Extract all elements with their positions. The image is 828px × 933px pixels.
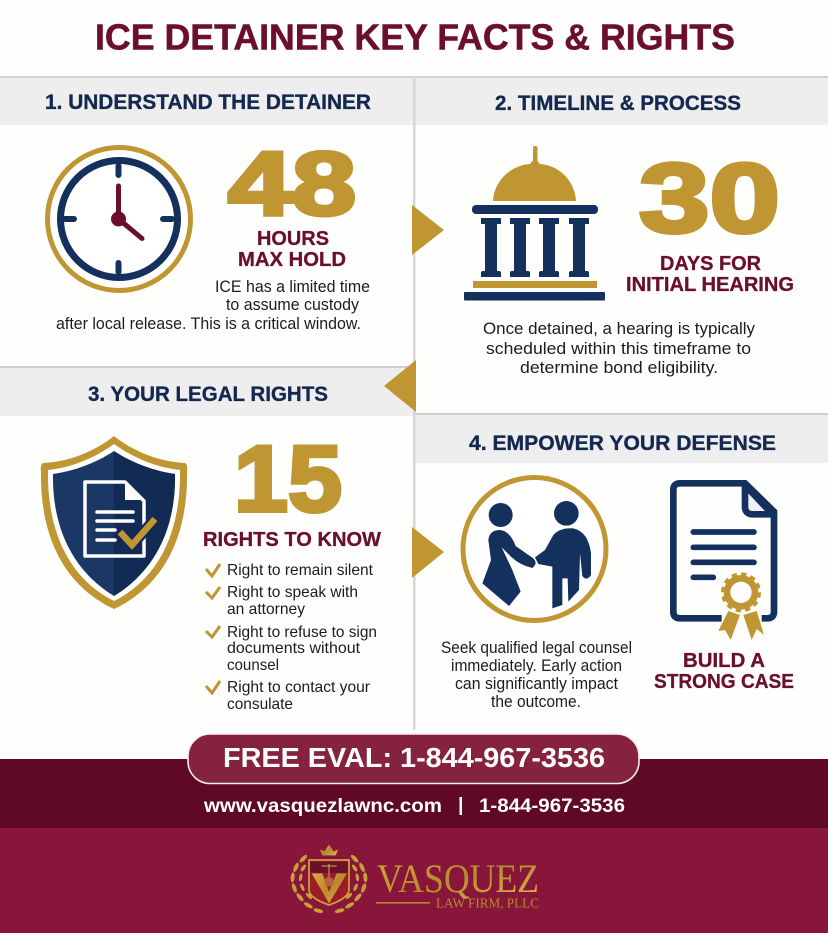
text: detainer description: to assume custody	[226, 296, 360, 314]
arrow: panel 3 to panel 4	[412, 527, 444, 578]
text: defense description: immediately. Early action	[451, 657, 622, 675]
text: timeline description: determine bond eligibility.	[520, 359, 718, 377]
list text: Right to contact your	[227, 679, 371, 696]
website and phone	[203, 795, 625, 817]
panel 3 header: 3. YOUR LEGAL RIGHTS	[88, 383, 328, 406]
stat: 15: 15	[234, 426, 342, 531]
call to action pill: FREE EVAL: 1-844-967-3536	[223, 742, 605, 773]
list text	[227, 562, 377, 713]
title: ICE DETAINER KEY FACTS & RIGHTS	[95, 16, 735, 58]
logo: Vasquez Law Firm	[290, 845, 539, 914]
panel 2 header: 2. TIMELINE & PROCESS	[495, 92, 741, 115]
stat label: rights to know: RIGHTS TO KNOW	[203, 529, 381, 551]
list text: Right to refuse to sign	[227, 624, 377, 641]
website and phone: 1-844-967-3536	[479, 795, 625, 817]
panel 3 header	[0, 368, 413, 416]
icon: check	[206, 681, 220, 693]
stat label: hours max hold: MAX HOLD	[238, 249, 346, 271]
list text: counsel	[227, 657, 279, 674]
stat: 30: 30	[639, 143, 780, 253]
wordmark: LAW FIRM, PLLC	[436, 896, 539, 912]
text: defense description: can significantly impact	[455, 675, 618, 693]
icon: check	[206, 564, 220, 576]
panel 1 header: 1. UNDERSTAND THE DETAINER	[45, 91, 371, 114]
list text: Right to speak with	[227, 584, 358, 601]
list text: Right to remain silent	[227, 562, 374, 579]
arrow: panel 2 to panel 3	[384, 360, 416, 412]
icon: check	[206, 587, 220, 598]
text: defense description: the outcome.	[491, 693, 581, 711]
text: timeline description: scheduled within this timeframe to	[486, 340, 751, 358]
icon: courthouse	[464, 146, 605, 300]
panel 1: understand the detainer	[0, 76, 414, 368]
panel 4 header	[415, 415, 828, 463]
icon: document with seal	[673, 483, 774, 640]
label: build a strong case: STRONG CASE	[654, 671, 794, 693]
text: detainer description	[56, 278, 370, 333]
text: timeline description: Once detained, a hearing is typically	[483, 320, 756, 338]
website and phone: www.vasquezlawnc.com	[203, 795, 442, 817]
list text: documents without	[227, 640, 361, 657]
label: build a strong case	[654, 650, 794, 693]
panel 1 header	[0, 78, 413, 125]
stat label: hours max hold: HOURS	[257, 228, 329, 250]
panel 2 header	[415, 78, 828, 125]
panel 4: empower your defense	[415, 413, 828, 711]
text: defense description: Seek qualified legal counsel	[441, 639, 632, 657]
contact band	[0, 759, 828, 828]
text: detainer description: ICE has a limited time	[215, 278, 370, 296]
panel 2: timeline and process	[415, 76, 828, 377]
icon: check	[206, 626, 220, 637]
label: build a strong case: BUILD A	[683, 650, 765, 672]
stat label: days for initial hearing: DAYS FOR	[660, 253, 762, 275]
text: detainer description: after local release. This is a critical window.	[56, 315, 361, 333]
stat label: days for initial hearing: INITIAL HEARING	[626, 274, 794, 296]
stat label: hours max hold	[238, 228, 346, 271]
icon: shield with document	[41, 436, 187, 609]
stat: 48: 48	[228, 134, 356, 234]
icon: clock	[48, 148, 190, 290]
panel 3: your legal rights	[0, 366, 413, 713]
stat label: days for initial hearing	[626, 253, 794, 296]
list text: an attorney	[227, 601, 305, 618]
text: defense description	[441, 639, 632, 711]
arrow: panel 1 to panel 2	[412, 205, 444, 255]
icon: crest	[290, 845, 368, 914]
logo band	[0, 828, 828, 933]
call to action pill	[188, 734, 639, 784]
list: rights	[206, 562, 377, 713]
text: timeline description	[483, 320, 756, 377]
icon: handshake	[463, 478, 606, 620]
panel 4 header: 4. EMPOWER YOUR DEFENSE	[469, 432, 776, 455]
list text: consulate	[227, 696, 293, 713]
wordmark: VASQUEZ	[377, 856, 539, 901]
